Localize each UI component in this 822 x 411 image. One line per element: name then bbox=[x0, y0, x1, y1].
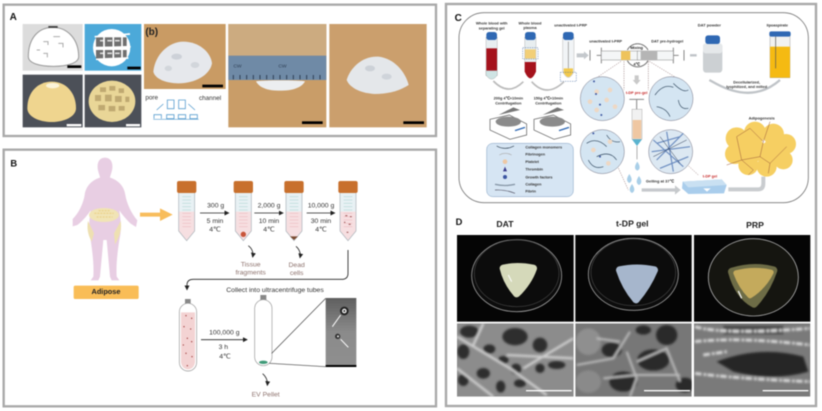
arrow: gelling at 37C: Gelling at 37℃ bbox=[646, 179, 675, 184]
diagram: pore and channel: channel bbox=[199, 95, 221, 102]
step 4 arrow and conditions: 3 h bbox=[219, 344, 228, 351]
step 3 arrow and conditions bbox=[307, 203, 335, 234]
dashed guides bbox=[593, 61, 698, 190]
arrow: container to DAT bbox=[690, 55, 780, 93]
callout: EV pellet: EV Pellet bbox=[252, 391, 280, 398]
step 1 arrow and conditions: 4℃ bbox=[209, 227, 221, 234]
panel D: gel comparison bbox=[456, 217, 810, 397]
callout: tissue fragments bbox=[235, 246, 266, 276]
micrograph: PRP bbox=[694, 323, 810, 397]
panel B: EV isolation from adipose bbox=[4, 150, 436, 406]
heading: collect into tubes: Collect into ultracentrifuge tubes bbox=[226, 287, 324, 294]
bottle: DAT powder: DAT powder bbox=[698, 23, 721, 28]
centrifuge 2: 150g 4℃×10min bbox=[534, 95, 564, 100]
step 2 arrow and conditions bbox=[254, 203, 283, 234]
legend: Collagen bbox=[525, 182, 542, 186]
centrifuge 1: 200g 4℃×10min bbox=[494, 95, 524, 100]
diagram: pore and channel bbox=[145, 94, 221, 119]
centrifuge 1 bbox=[490, 95, 527, 139]
curved arrows between tubes bbox=[493, 81, 564, 90]
arrow: to centrifuge bbox=[140, 208, 173, 221]
diagram: pore and channel: pore bbox=[145, 94, 158, 101]
tube 4 with particles bbox=[338, 181, 358, 241]
droplets bbox=[627, 162, 641, 193]
arrow: gel to adipogenesis bbox=[728, 177, 763, 189]
photo: dome CAD model bbox=[23, 24, 83, 71]
legend: Growth factors bbox=[525, 175, 553, 179]
photo: PRP dish bbox=[694, 235, 810, 322]
text: decellularized: Decellularized, bbox=[733, 80, 760, 84]
panel letter A: A bbox=[10, 12, 17, 23]
step 3 arrow and conditions: 10,000 g bbox=[308, 203, 334, 210]
container: lipoaspirate: lipoaspirate bbox=[767, 24, 788, 28]
photo (b): white scaffold on wood bbox=[144, 24, 226, 89]
legend: Fibrin bbox=[525, 190, 537, 194]
legend: Fibrinogen bbox=[525, 152, 546, 156]
circle: mixed gel bbox=[580, 130, 624, 174]
tube 3 with dead cell pellet bbox=[284, 181, 304, 241]
photo (b): white scaffold on wood: (b) bbox=[145, 27, 158, 38]
callout: dead cells: cells bbox=[290, 270, 304, 277]
step 4 arrow and conditions bbox=[201, 329, 247, 360]
panel letter C: C bbox=[455, 13, 462, 24]
gel block bbox=[682, 179, 727, 194]
photo: scaffold under ruler: CW bbox=[233, 63, 242, 69]
column heading: PRP: PRP bbox=[746, 220, 764, 230]
syringe with mixing: unactivated t-PRP bbox=[589, 40, 622, 44]
tube 1 bbox=[177, 181, 196, 241]
callout: tissue fragments: Tissue bbox=[241, 262, 261, 269]
tube: whole blood with gel bbox=[476, 22, 508, 79]
panel A: 3D printed scaffolds bbox=[4, 5, 436, 136]
text: decellularized bbox=[726, 80, 768, 89]
circle: gelled network bbox=[649, 130, 693, 174]
step 1 arrow and conditions: 300 g bbox=[207, 203, 224, 210]
callout: EV pellet bbox=[252, 374, 280, 398]
adipogenesis cluster bbox=[725, 115, 796, 177]
centrifuge 2: Centrifugation bbox=[535, 101, 562, 105]
adipogenesis cluster: Adipogenesis bbox=[749, 115, 776, 120]
syringe: vertical bbox=[629, 99, 644, 159]
tube with EV pellet bbox=[255, 295, 272, 366]
circle: DAT fibers bbox=[649, 77, 693, 121]
outer frame: panels C and D bbox=[446, 4, 816, 406]
legend bbox=[487, 143, 573, 197]
panel letter B: B bbox=[10, 159, 17, 169]
icon: human body bbox=[73, 158, 137, 280]
step 3 arrow and conditions: 4℃ bbox=[315, 227, 327, 234]
photo: printed solid dome bbox=[23, 75, 83, 127]
text: decellularized: lyophilized, and milled bbox=[726, 85, 768, 89]
centrifuge 2 bbox=[534, 95, 571, 139]
step 1 arrow and conditions bbox=[200, 203, 229, 234]
label: t-DP gel: t-DP gel bbox=[703, 174, 717, 178]
panel letter D: D bbox=[456, 217, 463, 227]
photo: DAT dish bbox=[457, 235, 574, 322]
label: Adipose: Adipose bbox=[92, 287, 120, 296]
syringe with mixing: Mixing bbox=[630, 45, 644, 50]
tube: unactivated t-PRP bbox=[554, 24, 587, 81]
tube: whole blood with gel: Whole blood with bbox=[476, 22, 508, 26]
photo: scaffold under ruler: CW bbox=[278, 63, 287, 69]
legend: Thrombin bbox=[525, 167, 544, 171]
step 4 arrow and conditions: 4℃ bbox=[219, 353, 231, 360]
label: t-DP pre-gel: t-DP pre-gel bbox=[626, 91, 647, 95]
callout: tissue fragments: fragments bbox=[235, 269, 266, 276]
arrow: gelling at 37C bbox=[642, 179, 681, 195]
circle: platelets bbox=[580, 77, 624, 121]
micrograph: EVs bbox=[326, 298, 356, 367]
photo: printed lattice disc bbox=[85, 75, 141, 127]
step 4 arrow and conditions: 100,000 g bbox=[209, 329, 240, 336]
arrow: t-PRP to syringe bbox=[577, 51, 589, 59]
photo: scaffold side view bbox=[329, 24, 427, 127]
callout: dead cells: Dead bbox=[288, 262, 305, 269]
centrifuge 1: Centrifugation bbox=[495, 101, 522, 105]
tube 2 with tissue pellet bbox=[234, 181, 253, 241]
container: lipoaspirate bbox=[767, 24, 791, 78]
legend: Collagen monomers bbox=[525, 145, 562, 149]
ultracentrifuge tube with particles bbox=[179, 299, 197, 371]
micrograph: DAT bbox=[457, 323, 574, 397]
legend: Platelet bbox=[525, 160, 540, 164]
step 2 arrow and conditions: 4℃ bbox=[263, 227, 275, 234]
photo: lattice CAD model bbox=[85, 24, 141, 71]
tube: whole blood plasma: plasma bbox=[523, 26, 537, 30]
syringe with mixing: 4℃ bbox=[633, 62, 641, 67]
column heading: DAT: DAT bbox=[496, 219, 514, 229]
photo: scaffold under ruler bbox=[228, 24, 326, 127]
callout: dead cells bbox=[288, 246, 305, 277]
tube: unactivated t-PRP: unactivated t-PRP bbox=[554, 24, 587, 28]
zoom lines bbox=[269, 298, 326, 367]
arrow: down bbox=[633, 75, 641, 85]
arrow: connector to ultracentrifuge bbox=[187, 250, 348, 290]
tube: whole blood plasma: Whole blood bbox=[519, 21, 542, 25]
photo: t-DP gel dish bbox=[575, 235, 692, 322]
step 3 arrow and conditions: 30 min bbox=[311, 218, 331, 225]
panel C: t-DP gel preparation bbox=[455, 13, 808, 203]
syringe with mixing: DAT pre-hydrogel bbox=[651, 40, 683, 44]
tube: whole blood with gel: separating gel bbox=[479, 26, 505, 30]
step 1 arrow and conditions: 5 min bbox=[207, 218, 224, 225]
syringe with mixing bbox=[589, 40, 684, 67]
bottle: DAT powder bbox=[698, 23, 722, 73]
step 2 arrow and conditions: 10 min bbox=[259, 218, 279, 225]
micrograph: t-DP gel bbox=[575, 323, 694, 397]
step 2 arrow and conditions: 2,000 g bbox=[258, 203, 281, 210]
label: Adipose bbox=[74, 286, 139, 299]
tube: whole blood plasma bbox=[519, 21, 542, 78]
column heading: t-DP gel: t-DP gel bbox=[616, 219, 649, 229]
